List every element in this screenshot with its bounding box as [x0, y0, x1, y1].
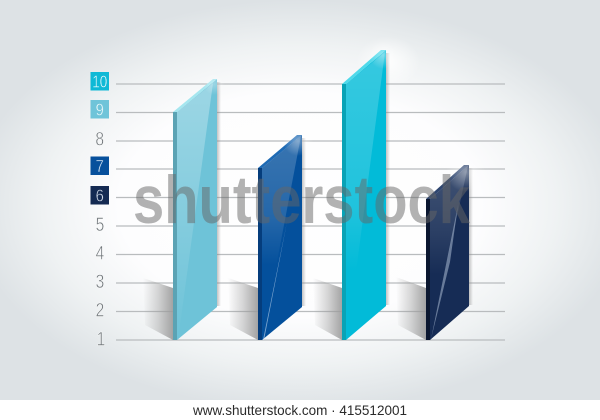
bar 3: cyan, value 10 — [342, 41, 397, 340]
label 2: 2 — [96, 299, 104, 321]
badge 9 — [90, 100, 109, 120]
badge 10: 10 — [92, 73, 107, 92]
label 3: 3 — [96, 271, 104, 292]
grid lines — [116, 84, 505, 340]
label 8: 8 — [95, 128, 104, 150]
label 1: 1 — [97, 328, 105, 350]
label 5: 5 — [96, 214, 104, 235]
watermark: shutterstock — [133, 162, 470, 238]
halo behind tallest bar — [356, 36, 420, 88]
axis labels — [90, 72, 109, 350]
bar 2: blue, value 7 — [258, 126, 313, 340]
footer strip — [0, 400, 600, 420]
bar 1: light blue, value 9 — [173, 73, 225, 340]
badge 6: 6 — [96, 186, 104, 206]
label 4: 4 — [96, 242, 105, 264]
footer text: www.shutterstock.com · 415512001 — [192, 402, 407, 418]
badge 7: 7 — [96, 157, 104, 176]
badge 6 — [90, 186, 109, 206]
bar shadows — [143, 277, 426, 340]
badge 9: 9 — [96, 100, 104, 120]
badge 7 — [90, 156, 109, 176]
bar 4: navy, value 6 — [426, 152, 486, 340]
